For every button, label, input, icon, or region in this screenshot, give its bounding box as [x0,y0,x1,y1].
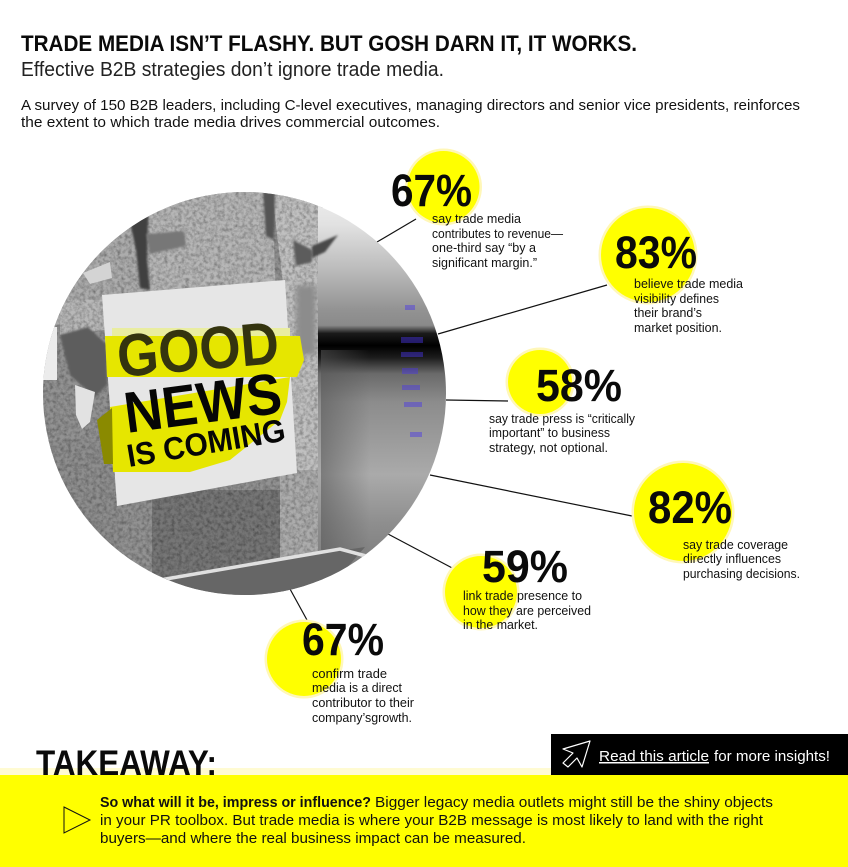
stat: 67% direct contributor [267,614,415,725]
stat: 67% revenue: contributes to revenue— [432,226,563,241]
stat: 67% revenue: say trade media [432,211,522,226]
stat: 67% revenue: one-third say “by a [432,240,537,255]
stat: 82% purchasing decisions: 82% [648,482,732,533]
poster [102,280,297,506]
stat: 58% critically important [489,350,635,455]
stat: 67% direct contributor: confirm trade [312,666,387,681]
stat: 59% perception: how they are perceived [463,603,591,618]
stat: 83% market position: visibility defines [634,291,719,306]
stat: 67% direct contributor: contributor to their [312,695,415,710]
intro text: A survey of 150 B2B leaders, including C-level executives, managing directors and senior vice presidents, reinforces [21,97,800,114]
yellow dot [634,463,732,561]
yellow highlights [112,328,290,336]
blurred background [318,206,446,581]
takeaway panel [0,775,848,867]
stat: 59% perception: in the market. [463,617,538,632]
takeaway text: Bigger legacy media outlets might still be the shiny objects [375,794,773,811]
stat: 67% direct contributor: company’sgrowth. [312,710,412,725]
yellow dot [445,556,517,628]
stat: 58% critically important: say trade press is “critically [489,411,635,426]
stat: 83% market position: market position. [634,320,722,335]
stat: 82% purchasing decisions [634,463,800,581]
stat: 83% market position: believe trade media [634,276,744,291]
takeaway text: buyers—and where the real business impact can be measured. [100,830,526,847]
stat: 67% revenue: significant margin.” [432,255,537,270]
stat: 59% perception: link trade presence to [463,588,582,603]
call to action box [551,734,848,775]
stat: 58% critically important: 58% [536,360,622,411]
stat: 67% revenue [391,151,563,270]
intro text: the extent to which trade media drives commercial outcomes. [21,114,440,131]
call to action text: Read this article [599,748,709,765]
takeaway text: So what will it be, impress or influence? [100,794,371,811]
intro text [21,97,800,131]
yellow dot [508,350,572,414]
stat: 67% direct contributor: 67% [302,614,384,665]
stat: 82% purchasing decisions: say trade coverage [683,537,788,552]
call to action text [599,748,830,765]
stat: 83% market position: their brand’s [634,305,702,320]
pale edge above takeaway band [0,768,551,775]
photo: poster on a wall, circular crop: NEWS [120,361,285,446]
subtitle: Effective B2B strategies don’t ignore trade media. [21,59,444,81]
photo: poster on a wall, circular crop [43,185,453,605]
photo: poster on a wall, circular crop: IS COMING [124,412,288,474]
stat: 82% purchasing decisions: directly influences [683,551,781,566]
icon: triangle arrow [64,807,90,833]
stat: 82% purchasing decisions: purchasing decisions. [683,566,800,581]
stat: 58% critically important: important” to business [489,425,610,440]
stat: 67% direct contributor: media is a direct [312,680,402,695]
stat: 59% perception [445,541,591,632]
icon: cursor arrow [563,741,590,767]
yellow dot [601,208,695,302]
takeaway text: in your PR toolbox. But trade media is where your B2B message is most likely to land with the right [100,812,764,829]
stat: 58% critically important: strategy, not optional. [489,440,608,455]
connector lines [290,219,632,620]
yellow dot [408,151,480,223]
takeaway text [100,794,773,847]
stat: 67% revenue: 67% [391,165,472,216]
takeaway heading: TAKEAWAY: [36,744,217,783]
call to action text: for more insights! [714,748,830,765]
yellow dot [267,622,341,696]
shelf [162,547,365,595]
stat: 59% perception: 59% [482,541,568,592]
stat: 83% market position: 83% [615,227,697,278]
wall [43,192,333,596]
title: TRADE MEDIA ISN’T FLASHY. BUT GOSH DARN IT, IT WORKS. [21,31,637,56]
poster lettering: GOOD [114,309,282,390]
stat: 83% market position [601,208,744,335]
